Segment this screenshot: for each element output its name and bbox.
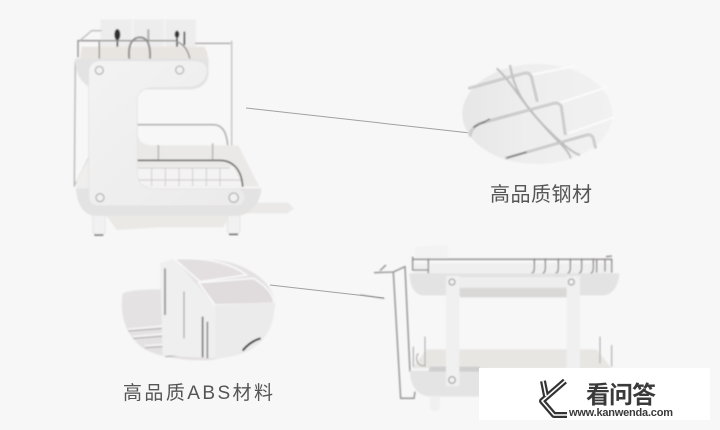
frame bolts (449, 279, 574, 383)
holder compartments (174, 258, 247, 282)
upper tray inside (80, 47, 208, 59)
lower base (76, 188, 261, 216)
watermark url: www.kanwenda.com (568, 407, 673, 419)
watermark logo (542, 381, 567, 415)
upper tray (75, 59, 209, 89)
frame uprights (446, 276, 459, 386)
lower tray interior (137, 132, 259, 187)
cutlery (165, 268, 207, 358)
top rail and hooks (413, 256, 612, 273)
product: dish rack front view (360, 245, 619, 411)
dark rim (243, 338, 261, 351)
long rails (530, 66, 614, 133)
pointer stub (360, 295, 385, 299)
detail circle: steel wire (462, 64, 614, 164)
pointer line: steel (246, 108, 470, 133)
crossing back wires (497, 65, 580, 158)
detail circle: ABS holder (122, 258, 275, 360)
foot (430, 396, 440, 411)
lower tray (412, 349, 612, 368)
caption: steel material: 高品质钢材 (490, 183, 592, 206)
upper wire rail (74, 31, 232, 187)
frame bolts (95, 66, 238, 202)
holder front face (215, 302, 274, 358)
detail background (462, 64, 612, 164)
caption: ABS material: 高品质ABS材料 (123, 382, 273, 404)
side wire hanger (374, 265, 415, 398)
upper tray rim (413, 263, 613, 273)
detail background (122, 258, 275, 360)
cutlery in holder (114, 29, 184, 53)
watermark panel (479, 368, 710, 420)
tray slats (128, 326, 185, 355)
pointer line: ABS (270, 285, 384, 298)
utensil holder back panel (101, 19, 196, 57)
feet and shadow (107, 216, 230, 230)
watermark name: 看问答 (586, 382, 656, 409)
drying grid (137, 125, 243, 187)
C-shaped frame (89, 61, 245, 206)
product: dish rack side view (74, 19, 294, 235)
holder cup (415, 245, 448, 260)
drip spout (247, 203, 294, 213)
upper tray (409, 273, 619, 295)
front wires (468, 73, 596, 158)
holder side panels (160, 259, 215, 358)
